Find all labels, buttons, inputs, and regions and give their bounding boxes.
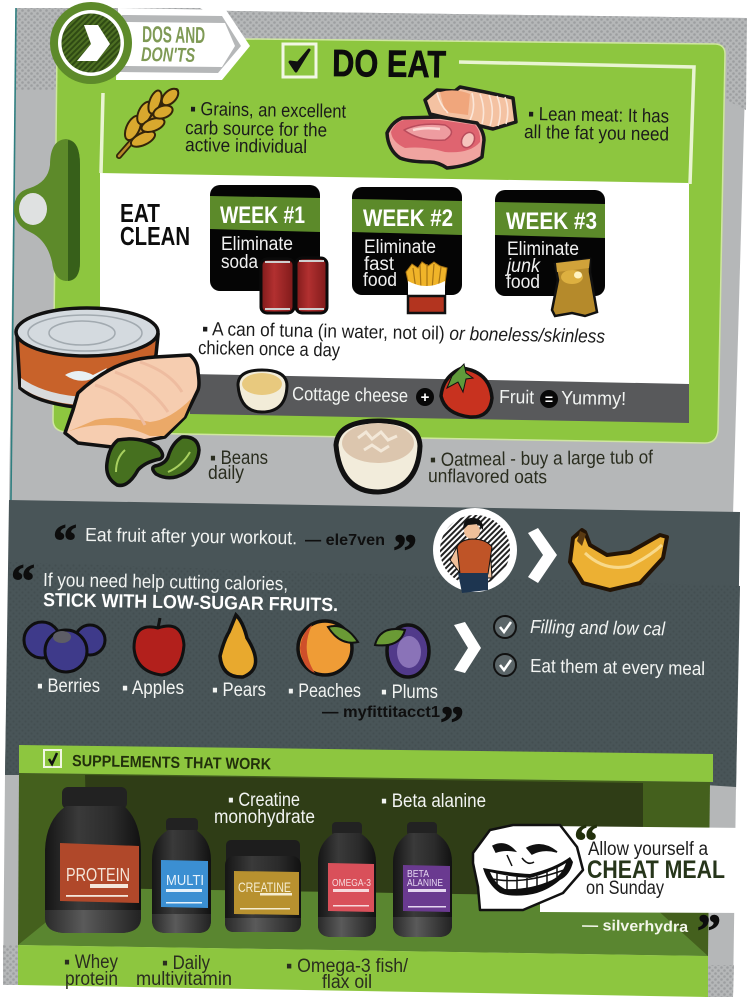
clipboard clip [14, 139, 80, 281]
attribution: myfittitacct1: — myfittitacct1 [322, 704, 440, 721]
text: grains: carb source for the [185, 118, 327, 141]
card: week 3: food [506, 272, 540, 293]
bottle: omega-3 [318, 822, 376, 937]
icon: tuna can [16, 308, 158, 407]
icon: banana [570, 530, 667, 590]
labels: fruit names [37, 676, 438, 703]
labels: fruit names: ▪ Apples [122, 678, 184, 699]
text: tuna or chicken: ▪ A can of tuna (in water, not oil) or boneless/skinless [202, 319, 606, 348]
labels: supplements top: monohydrate [214, 807, 315, 828]
bottle: creatine [225, 840, 301, 932]
arrow [528, 528, 557, 583]
icon: fries [406, 262, 447, 313]
labels: supplements bottom: ▪ Whey [64, 952, 118, 973]
icon: pear [220, 615, 256, 677]
text: grains [185, 99, 347, 158]
icon: chicken breast [65, 355, 199, 447]
icon: portrait [433, 508, 517, 593]
labels: fruit names: ▪ Pears [212, 680, 266, 701]
bottle: multi: MULTI [166, 872, 204, 889]
card: week 1: WEEK #1 [220, 202, 305, 229]
card: week 3: Eliminate [507, 239, 579, 260]
text: grains: active individual [185, 135, 307, 158]
card: week 2: Eliminate [364, 237, 436, 258]
labels: fruit names: ▪ Plums [381, 682, 438, 703]
callout: cheat meal: CHEAT MEAL [587, 856, 725, 884]
text: tuna or chicken [198, 319, 606, 361]
callout: cheat meal [473, 815, 749, 913]
text: oatmeal [428, 447, 654, 488]
card: week 1 [210, 185, 327, 313]
quote: low sugar fruits [11, 555, 338, 616]
bar: supplements heading: SUPPLEMENTS THAT WORK [72, 753, 272, 773]
checklist [494, 616, 705, 680]
bottle: omega-3: OMEGA-3 [332, 878, 371, 889]
bottle: beta alanine [393, 822, 452, 937]
text: cottage cheese equation: + [421, 389, 430, 406]
labels: supplements bottom [64, 952, 409, 993]
icon: lean meat [387, 87, 516, 168]
attribution: silverhydra [582, 905, 721, 958]
card: week 2: WEEK #2 [363, 205, 453, 232]
heading: do eat [283, 43, 446, 86]
white outline rule [101, 62, 694, 184]
icon: strawberry [441, 364, 492, 417]
attribution: silverhydra: — silverhydra [582, 917, 689, 936]
callout: cheat meal: “ [574, 815, 598, 868]
text: oatmeal: unflavored oats [428, 466, 547, 488]
callout: cheat meal: Allow yourself a [588, 839, 708, 860]
icon: beans [107, 437, 199, 485]
card: week 1: soda [221, 252, 258, 273]
attribution: silverhydra: ” [697, 905, 721, 958]
bottle: beta alanine: ALANINE [407, 878, 443, 889]
header badge: dos and don'ts: DOS AND [142, 21, 205, 48]
bar: supplements heading [19, 745, 713, 782]
text: cottage cheese equation [292, 384, 626, 410]
text: cottage cheese equation: Fruit [499, 387, 535, 409]
quote: ele7ven: Eat fruit after your workout. [85, 525, 297, 549]
callout: cheat meal: on Sunday [586, 878, 664, 899]
quote: low sugar fruits: If you need help cutting calories, [43, 570, 288, 595]
quote: ele7ven: — ele7ven [305, 532, 385, 549]
header badge: dos and don'ts [50, 2, 250, 84]
labels: supplements bottom: multivitamin [136, 969, 232, 990]
panel: dark fruit section [5, 500, 740, 790]
quote: low sugar fruits: STICK WITH LOW-SUGAR FRUITS. [43, 590, 338, 616]
text: tuna or chicken: chicken once a day [198, 338, 341, 361]
card: week 3: junk [504, 256, 541, 277]
icon: wheat [119, 86, 181, 156]
attribution: myfittitacct1: ” [440, 697, 464, 750]
heading: eat clean [120, 198, 190, 251]
icon: chevron circle [50, 2, 132, 84]
labels: supplements top: ▪ Beta alanine [381, 791, 486, 812]
icon: apple [134, 618, 184, 675]
labels: fruit names: ▪ Berries [37, 676, 100, 697]
text: lean meat: all the fat you need [524, 122, 669, 146]
quote: low sugar fruits: “ [11, 555, 35, 608]
checklist: Filling and low cal [530, 617, 666, 640]
labels: supplements top [214, 790, 486, 828]
text: oatmeal: ▪ Oatmeal - buy a large tub of [430, 447, 654, 471]
header badge: dos and don'ts: DON'TS [141, 44, 196, 67]
panel: do eat green card [53, 37, 725, 443]
bottle: protein [45, 787, 141, 933]
text: cottage cheese equation: = [545, 391, 553, 407]
attribution: myfittitacct1 [322, 697, 464, 750]
card: week 1: Eliminate [221, 234, 293, 255]
bottle: multi [152, 818, 211, 933]
text: beans: ▪ Beans [210, 448, 268, 469]
gray strip: cottage cheese [190, 374, 689, 423]
text: lean meat [524, 104, 669, 146]
labels: supplements top: ▪ Creatine [228, 790, 300, 811]
quote: ele7ven: “ [53, 515, 77, 568]
card: week 2: food [363, 270, 397, 291]
bottle: creatine: CREATINE [238, 879, 291, 895]
icon: berries [24, 622, 105, 672]
icon: soda cans [261, 258, 327, 313]
bottle: beta alanine: BETA [407, 869, 429, 880]
gray side strips [3, 775, 736, 997]
heading: do eat: DO EAT [332, 43, 446, 86]
labels: supplements bottom: protein [65, 969, 118, 990]
card: week 2 [352, 187, 462, 313]
icon: peach [298, 621, 358, 675]
panel: supplements shelf [18, 773, 710, 956]
heading: eat clean: CLEAN [120, 221, 190, 251]
icon: oatmeal bowl [336, 421, 420, 492]
quote: ele7ven: ” [393, 525, 417, 578]
icon: chip bag [552, 259, 597, 316]
quote: ele7ven [53, 515, 417, 578]
labels: supplements bottom: ▪ Daily [162, 953, 210, 974]
text: beans [208, 448, 268, 484]
checklist: Eat them at every meal [530, 656, 705, 680]
card: week 2: fast [364, 254, 395, 275]
icon: cottage cheese bowl [238, 370, 287, 412]
labels: supplements bottom: ▪ Omega-3 fish/ [286, 956, 409, 977]
heading: eat clean: EAT [120, 198, 160, 228]
text: cottage cheese equation: Cottage cheese [292, 384, 408, 407]
text: lean meat: ▪ Lean meat: It has [528, 104, 669, 127]
white content area [100, 173, 689, 386]
bar: bottom green [18, 945, 708, 997]
bottle: protein: PROTEIN [66, 865, 130, 885]
arrow [454, 622, 481, 673]
card: week 3 [495, 190, 605, 316]
icon: plum [375, 625, 429, 677]
icon: troll face [473, 825, 583, 910]
text: beans: daily [208, 463, 244, 484]
text: cottage cheese equation: Yummy! [561, 388, 626, 410]
card: week 3: WEEK #3 [506, 208, 597, 235]
labels: supplements bottom: flax oil [322, 972, 372, 993]
labels: fruit names: ▪ Peaches [288, 681, 361, 702]
text: grains: ▪ Grains, an excellent [190, 99, 347, 123]
